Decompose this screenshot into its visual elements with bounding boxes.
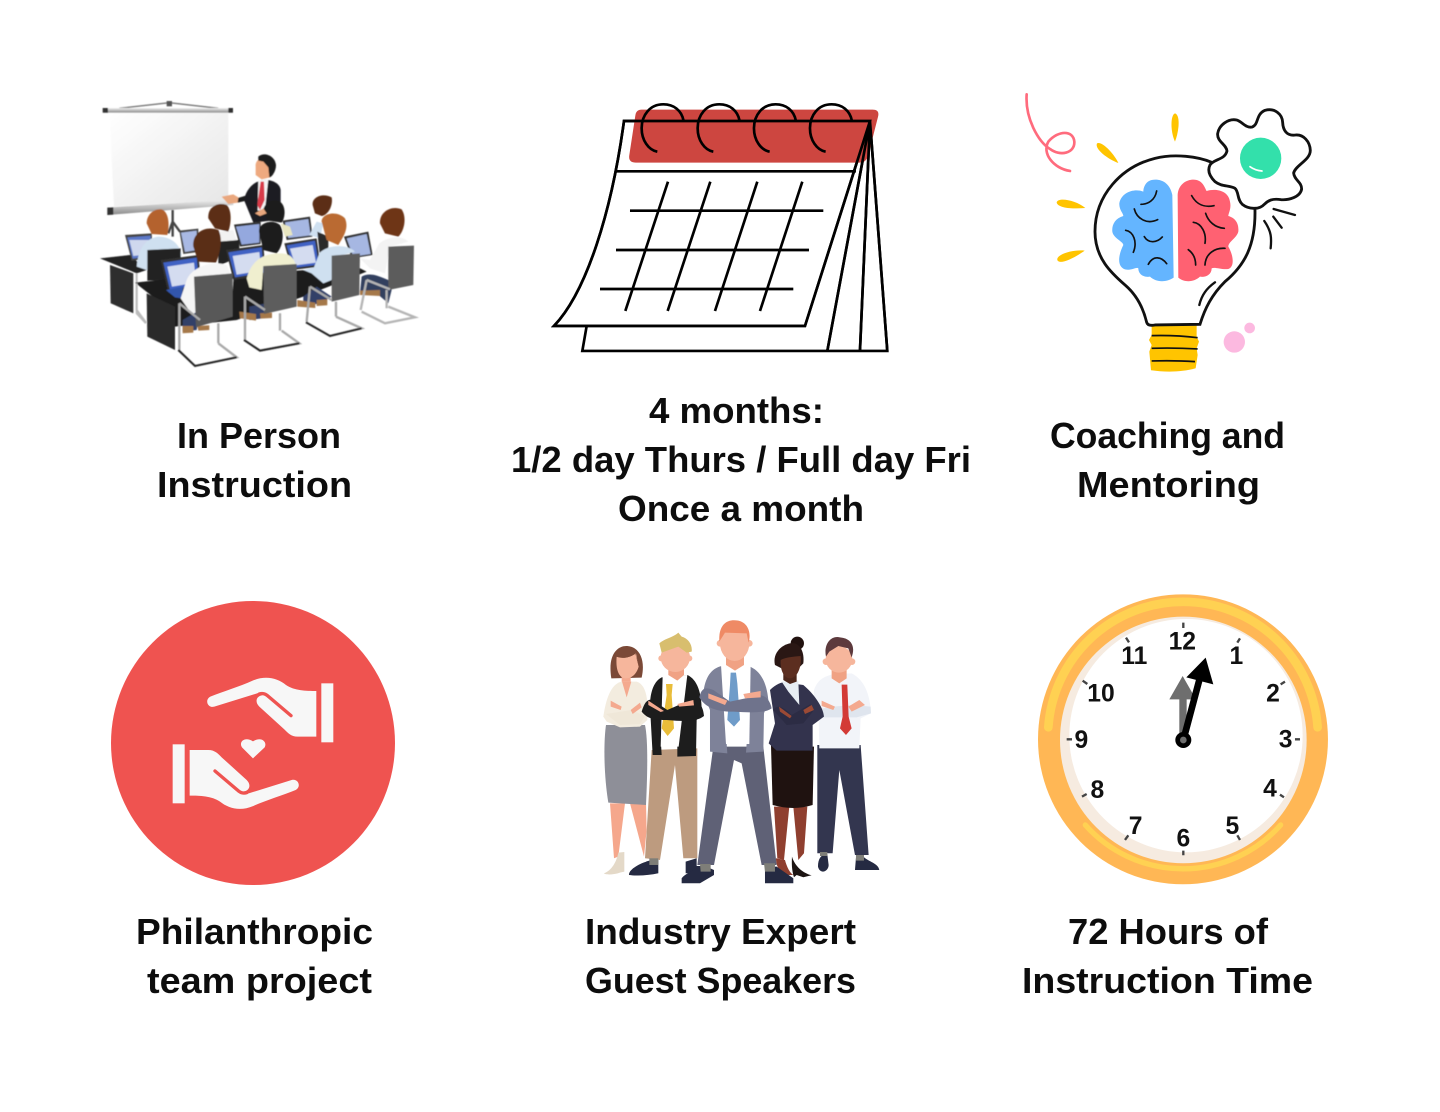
- heading: schedule: 1/2 day Thurs / Full day Fri: [511, 439, 971, 480]
- centre pin: [1175, 732, 1191, 748]
- presenter: [222, 154, 281, 223]
- illustration: wall clock: [1038, 594, 1328, 884]
- front page: [554, 121, 870, 326]
- illustration: light bulb with brain and gear: [1027, 94, 1310, 372]
- clock numbers: [1074, 628, 1293, 853]
- heading: philanthropic team project: team project: [147, 960, 372, 1001]
- black hour hand: [1183, 658, 1213, 740]
- bulb base: [1149, 326, 1199, 372]
- front desk: [135, 267, 367, 350]
- clock numbers: 1: [1229, 643, 1243, 670]
- heading: schedule: 4 months:: [649, 390, 824, 431]
- heading: philanthropic team project: [136, 911, 373, 1001]
- central man in grey suit: [682, 620, 793, 883]
- clock numbers: 4: [1263, 776, 1277, 803]
- heading: coaching and mentoring: [1050, 415, 1285, 505]
- clock numbers: 9: [1074, 727, 1088, 754]
- clock numbers: 5: [1225, 813, 1239, 840]
- gear: [1209, 110, 1310, 208]
- heading: 72 hours of instruction time: [1022, 911, 1313, 1001]
- front row students and chairs: [178, 213, 362, 366]
- heading: in person instruction: In Person: [177, 415, 341, 456]
- heading: coaching and mentoring: Mentoring: [1077, 464, 1260, 505]
- heading: 72 hours of instruction time: Instruction Time: [1022, 960, 1313, 1001]
- spark lines: [1199, 209, 1295, 305]
- clock face: [1060, 617, 1307, 863]
- back row desk and students: [100, 195, 415, 323]
- man with yellow tie: [629, 633, 704, 876]
- bulb outline: [1095, 156, 1255, 325]
- heading: industry expert guest speakers: Guest Speakers: [585, 960, 856, 1001]
- woman in dark jacket: [769, 637, 824, 877]
- brain folds: [1126, 191, 1225, 265]
- rim highlights: [1048, 602, 1318, 727]
- grey minute hand: [1169, 676, 1196, 738]
- gear centre: [1240, 138, 1281, 179]
- illustration: team of five professionals: [603, 620, 879, 883]
- clock numbers: 11: [1121, 643, 1148, 670]
- clock numbers: 3: [1279, 726, 1293, 753]
- clock numbers: 7: [1129, 813, 1143, 840]
- heading: in person instruction: Instruction: [157, 464, 352, 505]
- man with red tie: [813, 637, 879, 872]
- heading: industry expert guest speakers: [585, 911, 856, 1001]
- page outline: [554, 121, 870, 326]
- woman in grey skirt: [603, 646, 648, 874]
- red header band: [629, 110, 878, 163]
- calendar grid: [600, 182, 823, 311]
- clock rim: [1038, 594, 1328, 884]
- clock numbers: 12: [1169, 628, 1196, 655]
- clock numbers: 6: [1176, 826, 1190, 853]
- projector screen: [103, 101, 233, 237]
- yellow rays: [1057, 113, 1179, 262]
- clock numbers: 10: [1087, 681, 1115, 708]
- front row laptops: [161, 238, 321, 298]
- heading: schedule: [511, 390, 971, 529]
- pink squiggle: [1027, 94, 1074, 171]
- right brain: [1178, 180, 1238, 281]
- illustration: classroom with presenter: [100, 101, 415, 366]
- pink dots: [1224, 323, 1255, 353]
- binding rings: [642, 104, 852, 152]
- illustration: wall calendar: [554, 104, 887, 351]
- heading: schedule: Once a month: [618, 488, 864, 529]
- heading: in person instruction: [157, 415, 352, 505]
- back pages: [582, 121, 887, 351]
- heading: industry expert guest speakers: Industry Expert: [585, 911, 856, 952]
- lower rim highlight: [1085, 825, 1281, 869]
- heading: 72 hours of instruction time: 72 Hours of: [1068, 911, 1269, 952]
- clock numbers: 8: [1090, 777, 1104, 804]
- clock numbers: 2: [1266, 681, 1280, 708]
- red circle: [111, 601, 395, 885]
- hour ticks: [1067, 623, 1300, 855]
- hands and heart icon: [173, 678, 333, 809]
- illustration: caring hands badge: [111, 601, 395, 885]
- heading: philanthropic team project: Philanthropic: [136, 911, 373, 952]
- heading: coaching and mentoring: Coaching and: [1050, 415, 1285, 456]
- left brain: [1112, 180, 1174, 281]
